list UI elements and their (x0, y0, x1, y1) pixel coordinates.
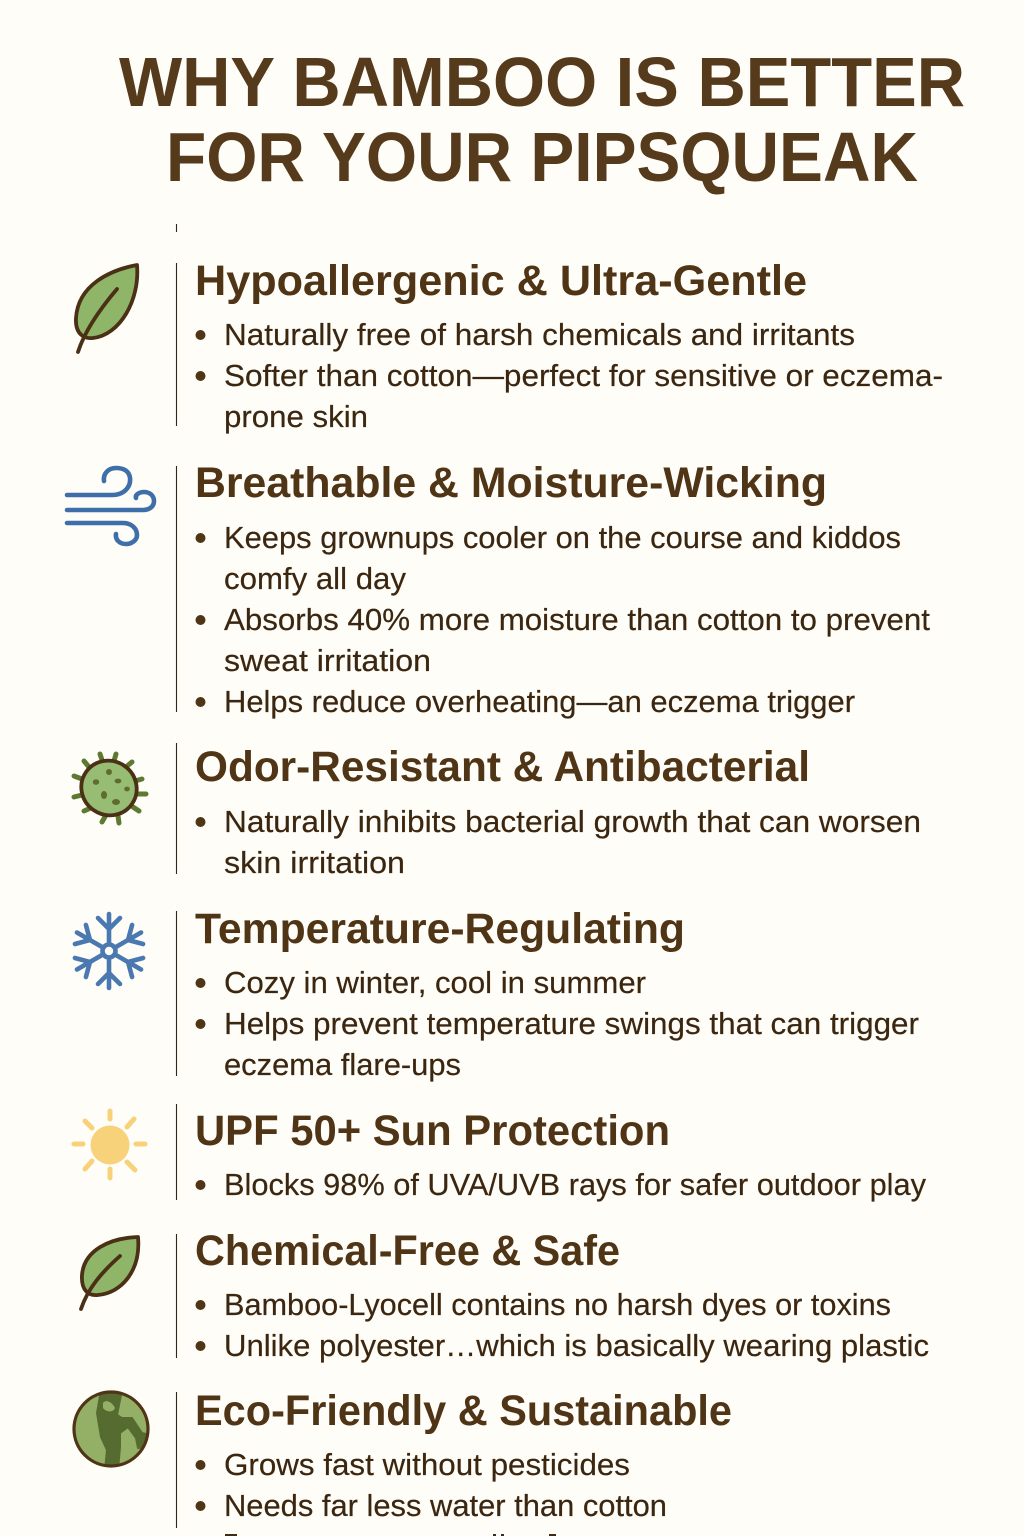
heading: Eco-Friendly & Sustainable (195, 1387, 732, 1435)
bullet (196, 358, 943, 434)
panel: breathable (67, 459, 930, 719)
bullet: Unlike polyester…which is basically wearing plastic (224, 1328, 929, 1363)
icon: wind (67, 468, 154, 544)
bullet: Naturally free of harsh chemicals and irritants (224, 317, 855, 352)
bullet: Helps prevent temperature swings that can trigger (224, 1006, 919, 1041)
title (119, 43, 965, 196)
bullet: Needs far less water than cotton (224, 1488, 667, 1523)
bullet: Bamboo-Lyocell contains no harsh dyes or toxins (224, 1287, 891, 1322)
heading: Temperature-Regulating (195, 905, 685, 953)
icon: leaf (81, 1237, 138, 1309)
bullet (196, 1006, 919, 1082)
panel: eco-friendly (74, 1387, 732, 1536)
icon: globe (74, 1390, 150, 1470)
bullet: Keeps grownups cooler on the course and kiddos (224, 520, 901, 555)
icon: bacteria (71, 750, 147, 826)
panel: temperature-regulating (71, 905, 919, 1082)
heading: Chemical-Free & Safe (195, 1227, 620, 1275)
bullet (196, 520, 901, 596)
icon: sun (74, 1111, 145, 1178)
bullet (196, 602, 930, 678)
bullet: eczema flare-ups (224, 1047, 461, 1082)
bullet: comfy all day (224, 561, 406, 596)
icon: snowflake (71, 914, 147, 988)
icon: leaf (76, 265, 137, 352)
heading: Odor-Resistant & Antibacterial (195, 743, 810, 791)
panel: sun protection (74, 1104, 926, 1202)
title: WHY BAMBOO IS BETTER (119, 43, 965, 121)
bullet: prone skin (224, 399, 368, 434)
bullet: skin irritation (224, 845, 405, 880)
bullet: Naturally inhibits bacterial growth that can worsen (224, 804, 921, 839)
bullet: Cozy in winter, cool in summer (224, 965, 646, 1000)
bullet: sweat irritation (224, 643, 431, 678)
bullet: Absorbs 40% more moisture than cotton to prevent (224, 602, 930, 637)
heading: Hypoallergenic & Ultra-Gentle (195, 257, 807, 305)
heading: Breathable & Moisture-Wicking (195, 459, 827, 507)
bullet: Grows fast without pesticides (224, 1447, 630, 1482)
bullet: Blocks 98% of UVA/UVB rays for safer outdoor play (224, 1167, 926, 1202)
panel: chemical-free (81, 1227, 929, 1363)
heading: UPF 50+ Sun Protection (195, 1107, 670, 1155)
clipped illegible line at the page edge (225, 1534, 556, 1536)
bullet (196, 804, 921, 880)
title: FOR YOUR PIPSQUEAK (166, 118, 918, 196)
bullet: Helps reduce overheating—an eczema trigger (224, 684, 855, 719)
panel: odor-resistant (71, 743, 921, 880)
panel: hypoallergenic (76, 257, 943, 434)
bullet: Softer than cotton—perfect for sensitive or eczema- (224, 358, 943, 393)
